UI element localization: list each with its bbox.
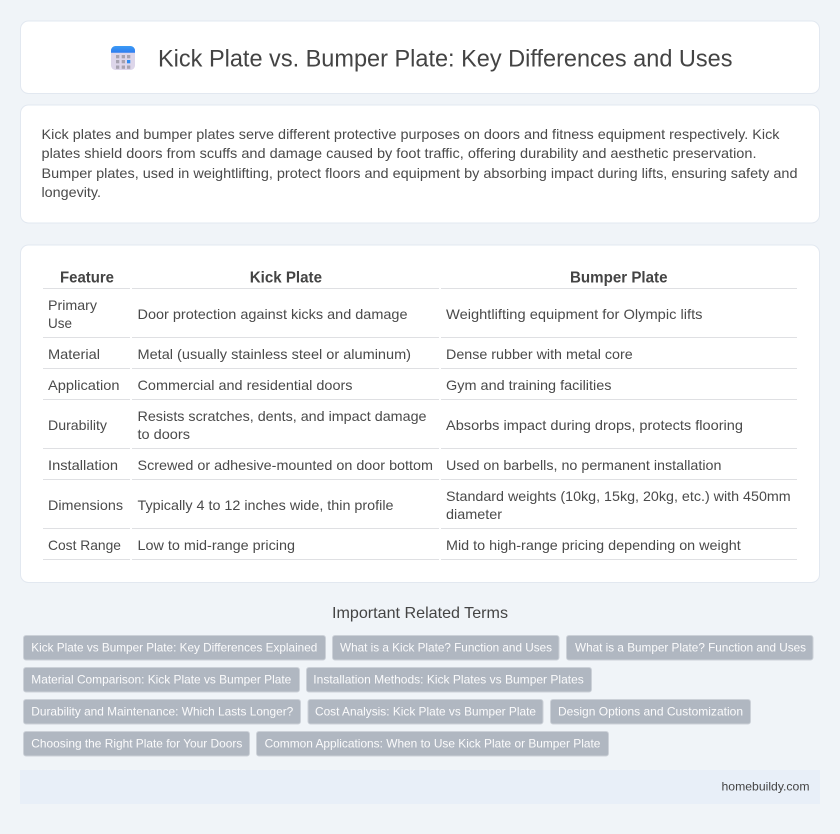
table rules [43, 288, 797, 560]
tag: What is a Kick Plate? Function and Uses [340, 641, 552, 655]
tag [24, 732, 250, 756]
text block: intro paragraph: Bumper plates, used in weightlifting, protect floors and equipment by absorbing impact during lifts, ensuring safety and [42, 165, 798, 181]
tag [566, 636, 813, 660]
panel: related term tags [24, 636, 813, 756]
row: primary use [48, 297, 702, 331]
tag [24, 700, 300, 724]
row: installation [48, 457, 722, 473]
row: cost range [48, 537, 741, 553]
footer site name: homebuildy.com [722, 780, 810, 794]
row: installation: Used on barbells, no permanent installation [446, 457, 722, 473]
row: durability: to doors [138, 426, 190, 442]
row: installation: Installation [48, 457, 118, 473]
row: material [48, 346, 633, 362]
tag: Cost Analysis: Kick Plate vs Bumper Plate [315, 705, 536, 719]
tag [256, 732, 608, 756]
tag: Material Comparison: Kick Plate vs Bumper Plate [31, 673, 292, 687]
tag: What is a Bumper Plate? Function and Uses [575, 641, 806, 655]
row: material: Dense rubber with metal core [446, 346, 633, 362]
tag [24, 636, 326, 660]
row: durability: Absorbs impact during drops, protects flooring [446, 417, 743, 433]
title: Kick Plate vs. Bumper Plate: Key Differences and Uses [158, 46, 732, 72]
row: dimensions: diameter [446, 506, 502, 522]
panel: header [20, 21, 820, 94]
row: cost range: Mid to high-range pricing depending on weight [446, 537, 741, 553]
row: material: Metal (usually stainless steel or aluminum) [138, 346, 411, 362]
row: primary use: Use [48, 315, 72, 331]
row: dimensions: Typically 4 to 12 inches wide, thin profile [138, 497, 394, 513]
text block: intro paragraph: longevity. [42, 184, 101, 200]
tag [24, 668, 300, 692]
text block: intro paragraph: plates shield doors from scuffs and damage caused by foot traffic, offering durability and aesthetic preservation. [42, 145, 756, 161]
tag: Design Options and Customization [558, 705, 743, 719]
row: dimensions: Standard weights (10kg, 15kg, 20kg, etc.) with 450mm [446, 488, 791, 504]
tag: Choosing the Right Plate for Your Doors [31, 737, 242, 751]
panel: introduction [20, 105, 820, 223]
row: application: Application [48, 377, 120, 393]
tag: Durability and Maintenance: Which Lasts Longer? [31, 705, 294, 719]
row: durability: Resists scratches, dents, and impact damage [138, 408, 427, 424]
row: cost range: Low to mid-range pricing [138, 537, 295, 553]
row: durability: Durability [48, 417, 107, 433]
tag [332, 636, 559, 660]
tag: Common Applications: When to Use Kick Plate or Bumper Plate [265, 737, 601, 751]
row: application: Gym and training facilities [446, 377, 612, 393]
tag: Installation Methods: Kick Plates vs Bumper Plates [313, 673, 584, 687]
row: cost range: Cost Range [48, 537, 121, 553]
table header: Bumper Plate [570, 270, 668, 286]
table header: Feature [60, 270, 114, 286]
row: installation: Screwed or adhesive-mounted on door bottom [138, 457, 433, 473]
footer [20, 770, 820, 804]
row: application: Commercial and residential doors [138, 377, 352, 393]
tag [550, 700, 750, 724]
icon: calendar [111, 46, 135, 70]
text block: intro paragraph: Kick plates and bumper plates serve different protective purposes on doors and fitness equipment respectively. Kick [42, 126, 781, 142]
row: application [48, 377, 612, 393]
tag [306, 668, 592, 692]
heading: related terms: Important Related Terms [332, 605, 508, 622]
row: dimensions [48, 488, 791, 522]
tag [308, 700, 543, 724]
row: durability [48, 408, 743, 442]
row: primary use: Door protection against kicks and damage [138, 306, 408, 322]
row: dimensions: Dimensions [48, 497, 123, 513]
row: primary use: Primary [48, 297, 97, 313]
panel: comparison table [20, 245, 820, 582]
text block: intro paragraph [42, 126, 798, 200]
tag: Kick Plate vs Bumper Plate: Key Differences Explained [31, 641, 317, 655]
table header: Kick Plate [250, 270, 322, 286]
table header [60, 270, 668, 286]
row: material: Material [48, 346, 100, 362]
row: primary use: Weightlifting equipment for Olympic lifts [446, 306, 702, 322]
